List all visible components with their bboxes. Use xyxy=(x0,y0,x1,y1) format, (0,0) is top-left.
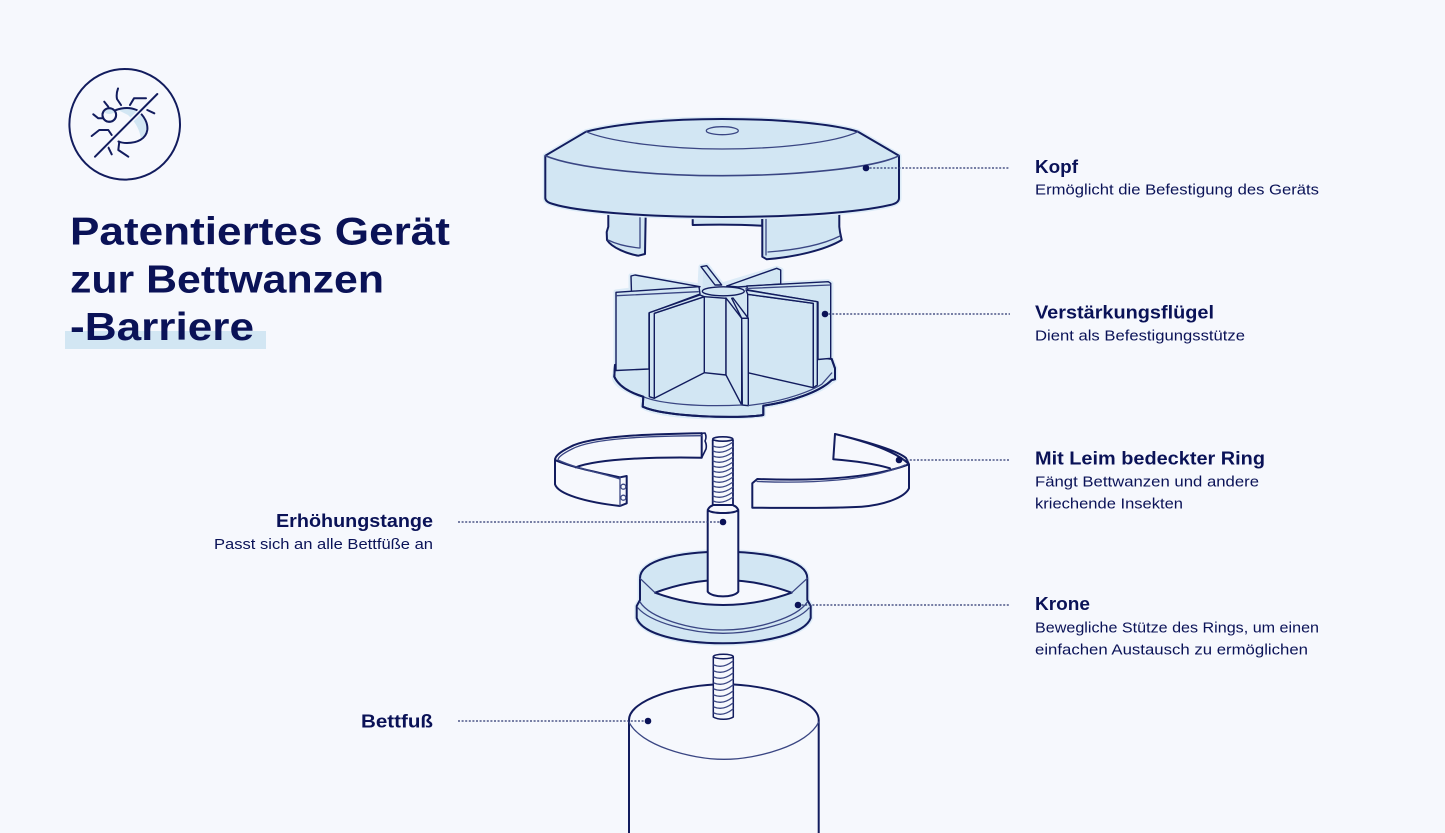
part: head (Kopf) xyxy=(545,119,899,259)
callout: Erhöhungstange: Erhöhungstange xyxy=(276,511,433,531)
callout: Mit Leim bedeckter Ring: Fängt Bettwanzen und andere xyxy=(1035,474,1259,490)
callout: Kopf xyxy=(863,157,1319,198)
part: riser rod (Erhöhungstange) with thread xyxy=(713,437,733,506)
callout: Verstärkungsflügel: Dient als Befestigungsstütze xyxy=(1035,328,1245,344)
callout: Krone: einfachen Austausch zu ermöglichen xyxy=(1035,642,1308,658)
icon: crossed-out bed bug xyxy=(69,69,180,180)
callout: Erhöhungstange: Passt sich an alle Bettfüße an xyxy=(214,537,433,553)
callout: Bettfuß xyxy=(361,712,651,732)
callout: Mit Leim bedeckter Ring: Mit Leim bedeckter Ring xyxy=(1035,448,1265,468)
callout: Erhöhungstange xyxy=(214,511,726,553)
callout: Verstärkungsflügel xyxy=(822,302,1245,344)
part: reinforcement wings (Verstärkungsflügel) xyxy=(614,266,835,417)
part: crown (Krone) xyxy=(637,552,811,643)
callout: Kopf: Ermöglicht die Befestigung des Geräts xyxy=(1035,182,1319,198)
title: zur Bettwanzen xyxy=(70,258,384,302)
title highlight xyxy=(65,331,266,349)
callout: Verstärkungsflügel: Verstärkungsflügel xyxy=(1035,302,1214,322)
callout: Mit Leim bedeckter Ring: kriechende Insekten xyxy=(1035,496,1183,512)
part: bed leg (Bettfuß) xyxy=(629,684,819,833)
callout: Bettfuß: Bettfuß xyxy=(361,712,433,732)
part: glue-covered ring, left half xyxy=(555,433,706,506)
callout: Krone: Krone xyxy=(1035,594,1090,614)
part: riser rod collar xyxy=(708,505,738,596)
title: -Barriere xyxy=(70,306,254,349)
part: glue-covered ring, right half xyxy=(752,434,909,508)
part: threaded stud of the bed leg xyxy=(713,654,733,719)
callout: Mit Leim bedeckter Ring xyxy=(896,448,1265,512)
title: Patentiertes Gerät xyxy=(70,210,450,254)
title xyxy=(65,210,450,349)
callout: Krone xyxy=(795,594,1319,658)
callout: Kopf: Kopf xyxy=(1035,157,1079,177)
callout: Krone: Bewegliche Stütze des Rings, um einen xyxy=(1035,620,1319,636)
